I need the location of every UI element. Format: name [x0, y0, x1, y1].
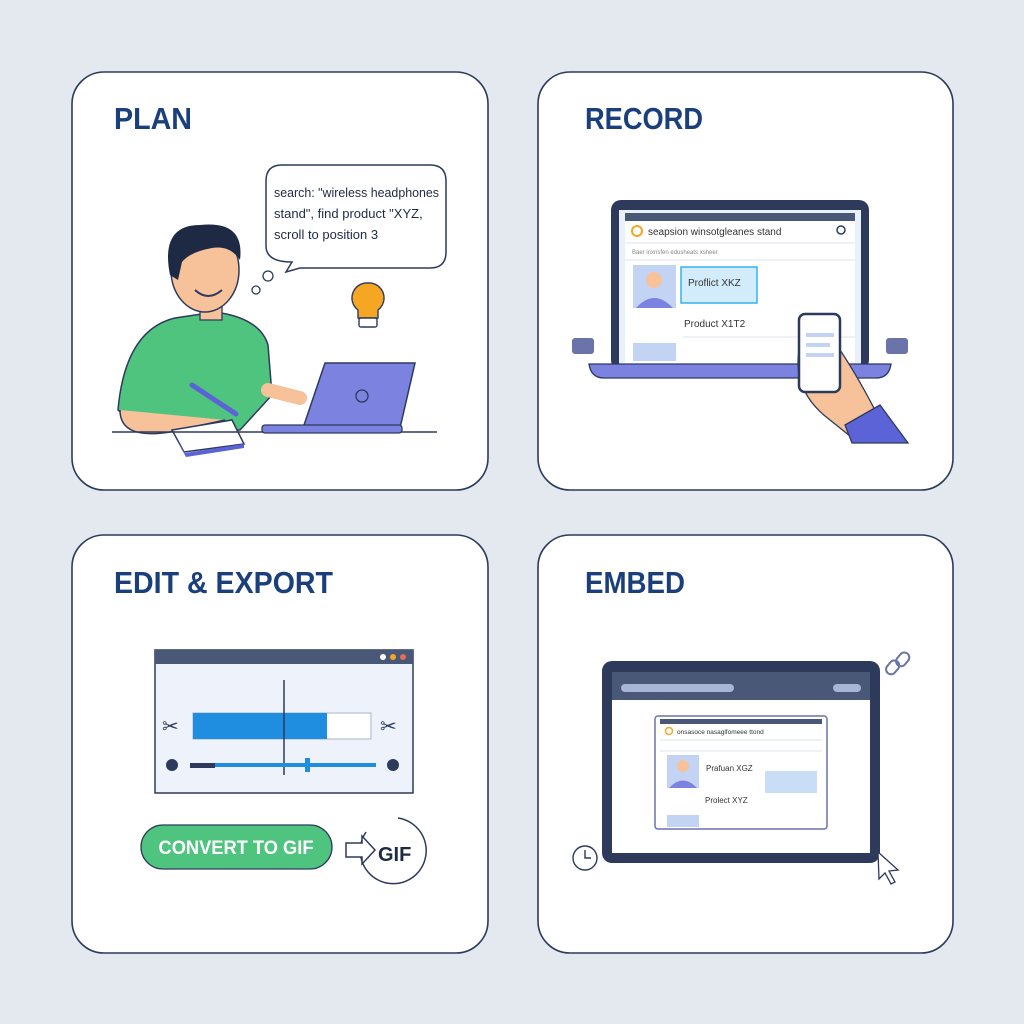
laptop with browser: seapsion winsotgleanes stand: [648, 227, 781, 238]
editor window: [155, 650, 413, 793]
heading: edit & export: EDIT & EXPORT: [114, 565, 333, 600]
laptop with browser: [572, 200, 908, 378]
editor window: ✂: [162, 716, 179, 738]
hand with phone: [798, 314, 908, 443]
panel: edit & export: [72, 535, 488, 953]
person at laptop: [112, 224, 437, 457]
browser frame with embed: Prolect XYZ: [705, 796, 748, 805]
speech bubble: search: "wireless headphones: [274, 185, 439, 200]
laptop with browser: Baer inxnsfen edusheats xsheer: [632, 250, 718, 256]
editor window: ✂: [380, 716, 397, 738]
panel: record: [538, 72, 953, 490]
speech bubble: [252, 165, 446, 294]
speech bubble: scroll to position 3: [274, 227, 378, 242]
laptop with browser: Product X1T2: [684, 319, 746, 330]
icon: link: [884, 650, 911, 676]
icon: cursor: [878, 852, 898, 884]
heading: record: RECORD: [585, 101, 703, 136]
button: convert to gif: CONVERT TO GIF: [158, 838, 314, 859]
speech bubble: stand", find product "XYZ,: [274, 206, 423, 221]
laptop with browser: Proflict XKZ: [688, 278, 741, 289]
button: convert to gif: [141, 825, 332, 869]
panel: plan: [72, 72, 488, 490]
browser frame with embed: onsasoce nasaglfomeee ttond: [677, 729, 764, 736]
heading: plan: PLAN: [114, 101, 192, 136]
icon: light bulb: [352, 283, 384, 327]
heading: embed: EMBED: [585, 565, 685, 600]
browser frame with embed: Prafuan XGZ: [706, 764, 753, 773]
icon: gif: GIF: [378, 844, 411, 866]
browser frame with embed: [602, 661, 880, 863]
icon: clock: [573, 846, 597, 870]
icon: gif: [346, 818, 426, 884]
panel: embed: [538, 535, 953, 953]
